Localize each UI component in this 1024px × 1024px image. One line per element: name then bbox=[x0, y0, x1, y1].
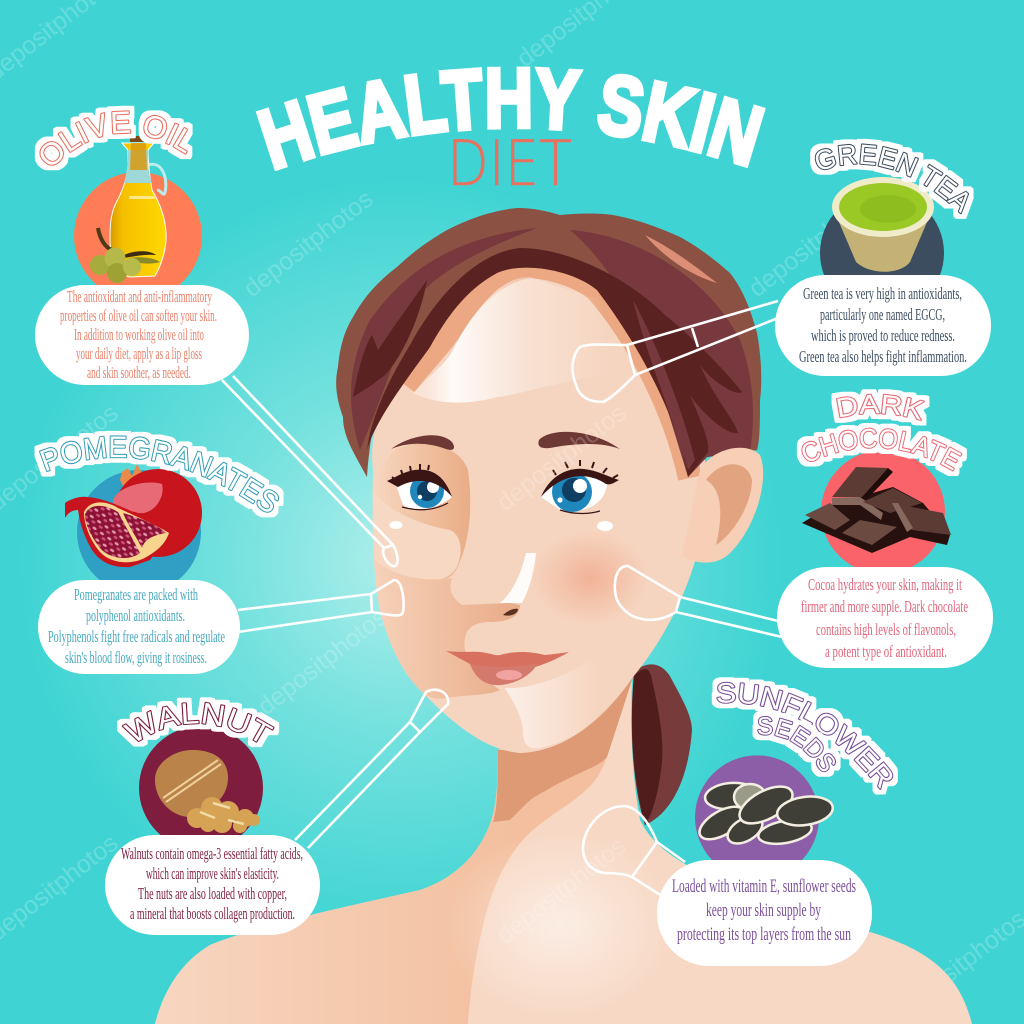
hair wine band right bbox=[570, 230, 753, 477]
heading: GREEN TEA bbox=[810, 138, 974, 219]
heading: dark: DARK bbox=[832, 389, 930, 426]
hair wine band left bbox=[351, 228, 537, 450]
text block bbox=[121, 844, 303, 923]
panel: sunflower seeds bbox=[657, 677, 898, 966]
chin highlight bbox=[505, 655, 620, 748]
watermarks on figure bbox=[491, 399, 631, 950]
neck light bbox=[445, 830, 675, 1020]
heading: chocolate: CHOCOLATE bbox=[796, 423, 967, 476]
text block bbox=[799, 284, 967, 366]
hair dark streak left bbox=[353, 280, 427, 397]
circle bbox=[74, 172, 202, 300]
circle bbox=[139, 726, 263, 850]
under-eye dots bbox=[390, 521, 402, 529]
brush: green tea to forehead bbox=[573, 301, 778, 402]
text block: The nuts are also loaded with copper, bbox=[138, 884, 287, 903]
text block: Pomegranates are packed with bbox=[74, 585, 198, 604]
ear bbox=[682, 448, 763, 563]
face bbox=[372, 262, 707, 753]
icon: walnut bbox=[155, 750, 260, 833]
brush: walnut to chin bbox=[295, 690, 448, 848]
icon: tea cup bbox=[832, 177, 934, 272]
text block: Polyphenols fight free radicals and regulate bbox=[48, 627, 225, 646]
watermarks: depositphotos bbox=[252, 603, 392, 721]
bubble bbox=[777, 567, 993, 668]
text block bbox=[801, 575, 968, 661]
left eye bbox=[387, 464, 452, 510]
text block: protecting its top layers from the sun bbox=[677, 924, 851, 945]
text block: a potent type of antioxidant. bbox=[825, 642, 947, 661]
text block bbox=[60, 287, 217, 382]
heading: POMEGRANATES bbox=[34, 430, 284, 518]
lower left shading bbox=[375, 560, 520, 699]
shoulders and neck bbox=[155, 680, 972, 1024]
text block: In addition to working olive oil into bbox=[74, 325, 204, 344]
lips bbox=[446, 651, 569, 685]
text block bbox=[48, 585, 225, 667]
text block bbox=[672, 876, 856, 945]
brush: olive oil to cheek bbox=[222, 376, 398, 566]
watermarks on figure: depositphotos bbox=[491, 399, 631, 517]
title: Healthy Skin: HEALTHY SKIN bbox=[256, 66, 766, 172]
text block: The antioxidant and anti-inflammatory bbox=[67, 287, 212, 306]
bubble bbox=[105, 835, 320, 935]
ponytail bbox=[632, 664, 692, 825]
nose highlight bbox=[500, 553, 536, 603]
brush: pomegranate to cheek bbox=[238, 580, 404, 632]
panel: olive oil bbox=[34, 106, 249, 385]
nostril bbox=[503, 609, 518, 616]
heading: OLIVE OIL bbox=[34, 106, 193, 170]
watermarks: depositphotos bbox=[238, 185, 378, 303]
olives bbox=[98, 228, 112, 250]
hair highlight bbox=[645, 235, 717, 283]
brush: dark chocolate to cheek bbox=[615, 566, 782, 637]
circle bbox=[695, 755, 819, 860]
text block: skin's blood flow, giving it rosiness. bbox=[65, 648, 207, 667]
heading: sunflower: SUNFLOWER bbox=[712, 677, 898, 794]
panel: pomegranates bbox=[34, 430, 284, 674]
face left shading bbox=[374, 443, 470, 581]
hair dark crescent bbox=[367, 248, 742, 477]
panel: green tea bbox=[775, 138, 991, 376]
panel: dark chocolate bbox=[777, 389, 993, 668]
heading: WALNUT bbox=[117, 697, 280, 748]
text block: properties of olive oil can soften your skin. bbox=[60, 306, 217, 325]
eyebrows bbox=[391, 435, 454, 450]
circle bbox=[820, 191, 944, 315]
ear inner bbox=[706, 464, 752, 545]
text block: your daily diet, apply as a lip gloss bbox=[76, 344, 202, 363]
ponytail dark strand bbox=[632, 669, 662, 825]
brush: sunflower seeds to neck bbox=[583, 806, 685, 896]
cheek patch bbox=[373, 490, 461, 581]
bubble bbox=[775, 275, 991, 376]
watermarks on figure: depositphotos bbox=[491, 832, 631, 950]
icon: chocolate pieces bbox=[802, 467, 951, 553]
right eye bbox=[541, 460, 619, 514]
text block: keep your skin supple by bbox=[706, 900, 821, 921]
heading: seeds: SEEDS bbox=[752, 712, 841, 777]
bubble bbox=[35, 285, 249, 385]
cheek blush bbox=[530, 530, 650, 626]
watermarks: depositphotos bbox=[743, 185, 883, 303]
neck shadow bbox=[493, 677, 633, 822]
icon: olive oil bottle bbox=[90, 136, 166, 283]
hair bbox=[336, 208, 761, 477]
bubble bbox=[38, 580, 240, 674]
hair wine streak right bbox=[633, 300, 695, 470]
left shoulder shading bbox=[155, 677, 633, 1024]
forehead highlight bbox=[413, 277, 610, 403]
circle bbox=[821, 450, 945, 574]
subtitle: Diet: DIET bbox=[453, 139, 572, 186]
bubble bbox=[657, 860, 872, 966]
text block: and skin soother, as needed. bbox=[87, 363, 191, 382]
woman figure bbox=[155, 208, 972, 1024]
icon: seeds bbox=[694, 779, 835, 849]
icon: pomegranate bbox=[65, 464, 202, 567]
circle bbox=[77, 470, 201, 594]
text block: Walnuts contain omega-3 essential fatty acids, bbox=[121, 844, 303, 863]
text block: which can improve skin's elasticity. bbox=[146, 864, 279, 883]
text block: a mineral that boosts collagen production. bbox=[130, 904, 295, 923]
text block: polyphenol antioxidants. bbox=[86, 606, 185, 625]
hairline shadow bbox=[405, 266, 690, 478]
text block: Loaded with vitamin E, sunflower seeds bbox=[672, 876, 856, 897]
panel: walnut bbox=[105, 697, 320, 935]
